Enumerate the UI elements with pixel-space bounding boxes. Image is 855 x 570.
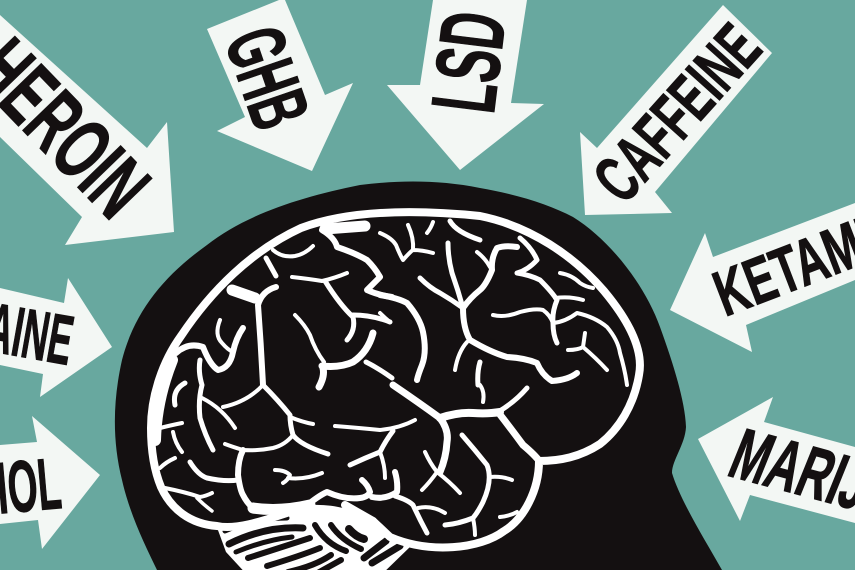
sulci bbox=[155, 221, 627, 535]
cerebellum bbox=[215, 505, 412, 570]
arrow: GHB bbox=[207, 0, 353, 171]
head silhouette bbox=[115, 182, 722, 570]
arrow: KETAMINE bbox=[670, 181, 855, 352]
arrow: CAFFEINE bbox=[579, 5, 775, 216]
arrow: ALCOHOL bbox=[0, 416, 100, 549]
arrow: COCAINE bbox=[0, 274, 112, 397]
arrow: GHB: GHB bbox=[207, 15, 328, 140]
arrow: LSD bbox=[387, 0, 544, 170]
arrow: HEROIN bbox=[0, 15, 174, 245]
brain outline bbox=[151, 212, 640, 547]
brain bbox=[151, 212, 640, 570]
